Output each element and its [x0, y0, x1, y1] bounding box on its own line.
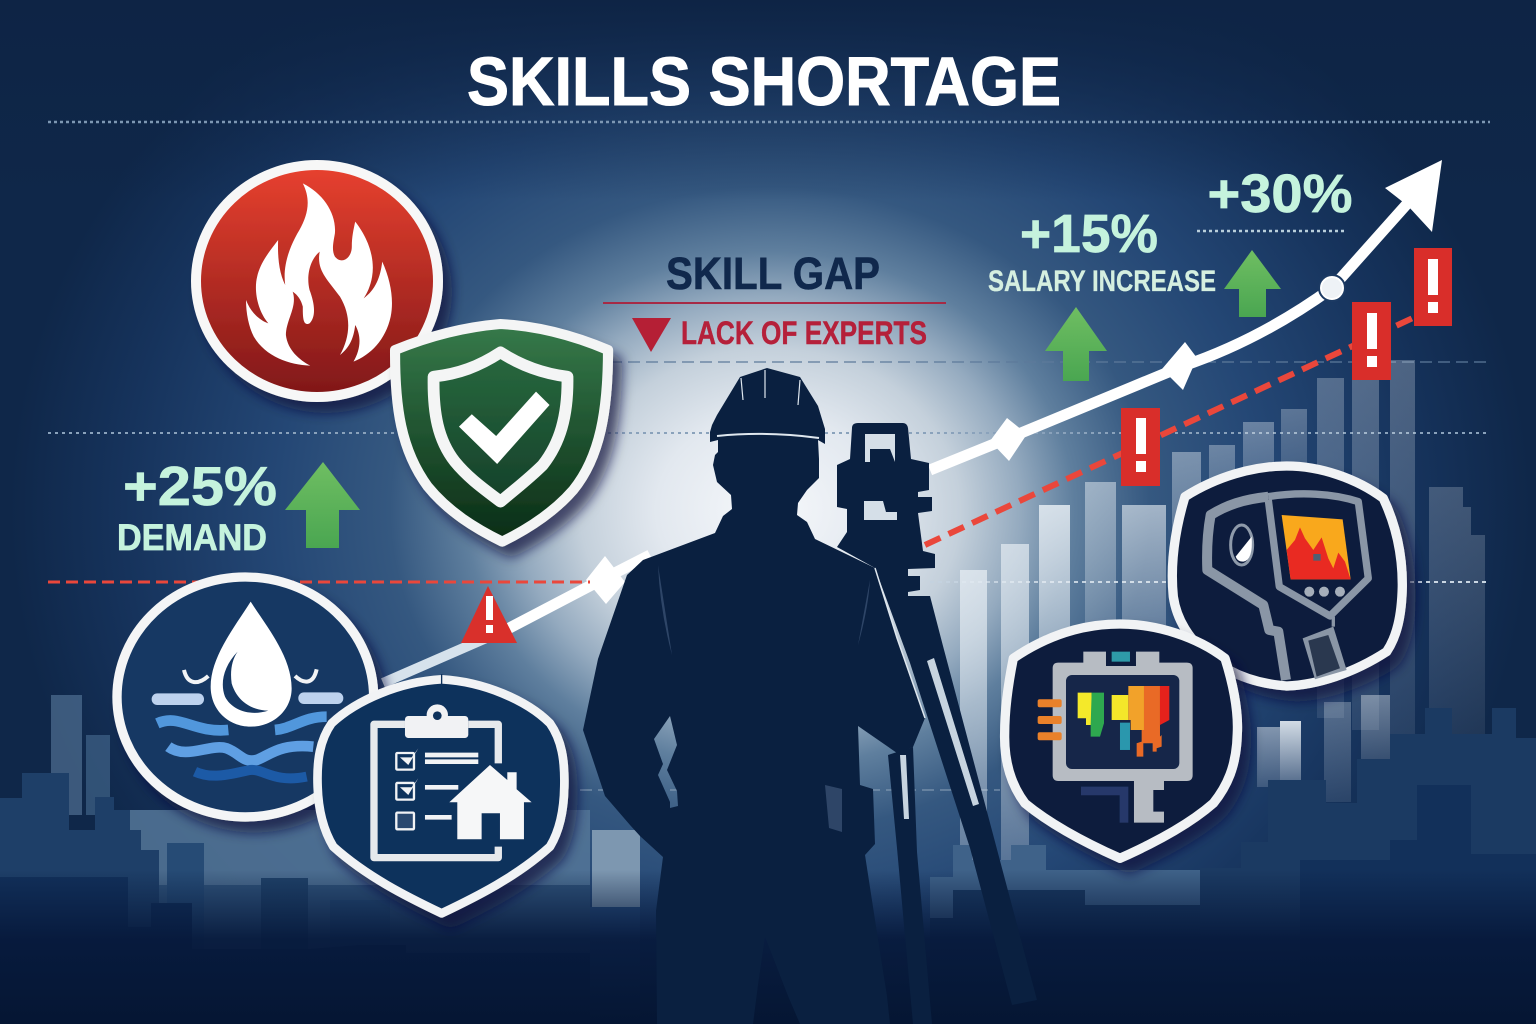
grip	[1303, 627, 1347, 679]
skyline: left and right buildings	[0, 695, 1536, 1024]
house	[449, 765, 532, 839]
salary stat +15%: +15%	[1020, 204, 1158, 264]
pouch and jacket folds	[658, 565, 870, 832]
checklist rows	[396, 753, 478, 829]
bar chart skyline: right	[960, 360, 1485, 880]
lens	[1231, 525, 1253, 565]
salary stat +30%: +30%	[1208, 164, 1352, 224]
instrument head and tripod	[837, 423, 1037, 1024]
waves	[157, 669, 327, 778]
check mark	[459, 392, 550, 464]
icon: demand arrow	[285, 462, 360, 548]
chart grid lines	[48, 122, 1490, 790]
demand stat: +25%	[123, 455, 277, 517]
clipboard	[374, 724, 498, 858]
tripod highlights	[900, 658, 979, 819]
heat map	[1078, 693, 1092, 725]
instrument cut-outs	[864, 434, 897, 520]
dotted underline	[1197, 230, 1344, 232]
device frame	[1053, 652, 1193, 823]
salary increase label: SALARY INCREASE	[988, 265, 1216, 298]
surveyor with total station silhouette	[583, 368, 1037, 1024]
icon: down triangle	[632, 318, 671, 352]
lack of experts label: LACK OF EXPERTS	[681, 315, 927, 351]
flame	[246, 183, 392, 366]
icon: salary arrow lower	[1045, 307, 1107, 381]
skill gap heading: SKILL GAP	[666, 248, 880, 299]
person	[583, 368, 925, 1024]
icon: fire badge	[196, 165, 438, 397]
icon: thermal camera badge	[1172, 466, 1402, 686]
icon: water badge	[117, 577, 374, 817]
icon: checklist badge	[317, 674, 564, 913]
icon: thermal device badge	[1005, 624, 1237, 858]
icon: green shield badge	[395, 324, 608, 542]
water drop	[211, 602, 292, 727]
title: SKILLS SHORTAGE	[467, 43, 1061, 120]
skill gap divider	[603, 302, 946, 304]
alert markers	[461, 248, 1452, 643]
demand stat	[117, 455, 277, 558]
icon: salary arrow upper	[1224, 250, 1281, 317]
helmet and jacket highlights	[717, 370, 925, 718]
screen buttons	[1304, 587, 1345, 597]
bracket	[1081, 791, 1124, 823]
red dashed lines	[48, 310, 1430, 582]
thermal screen	[1282, 515, 1351, 579]
rising salary trend line with arrow	[383, 160, 1442, 683]
orange connectors	[1038, 699, 1062, 740]
teal tab	[1112, 652, 1130, 662]
demand stat: DEMAND	[117, 517, 267, 558]
camera body outline	[1207, 494, 1368, 680]
